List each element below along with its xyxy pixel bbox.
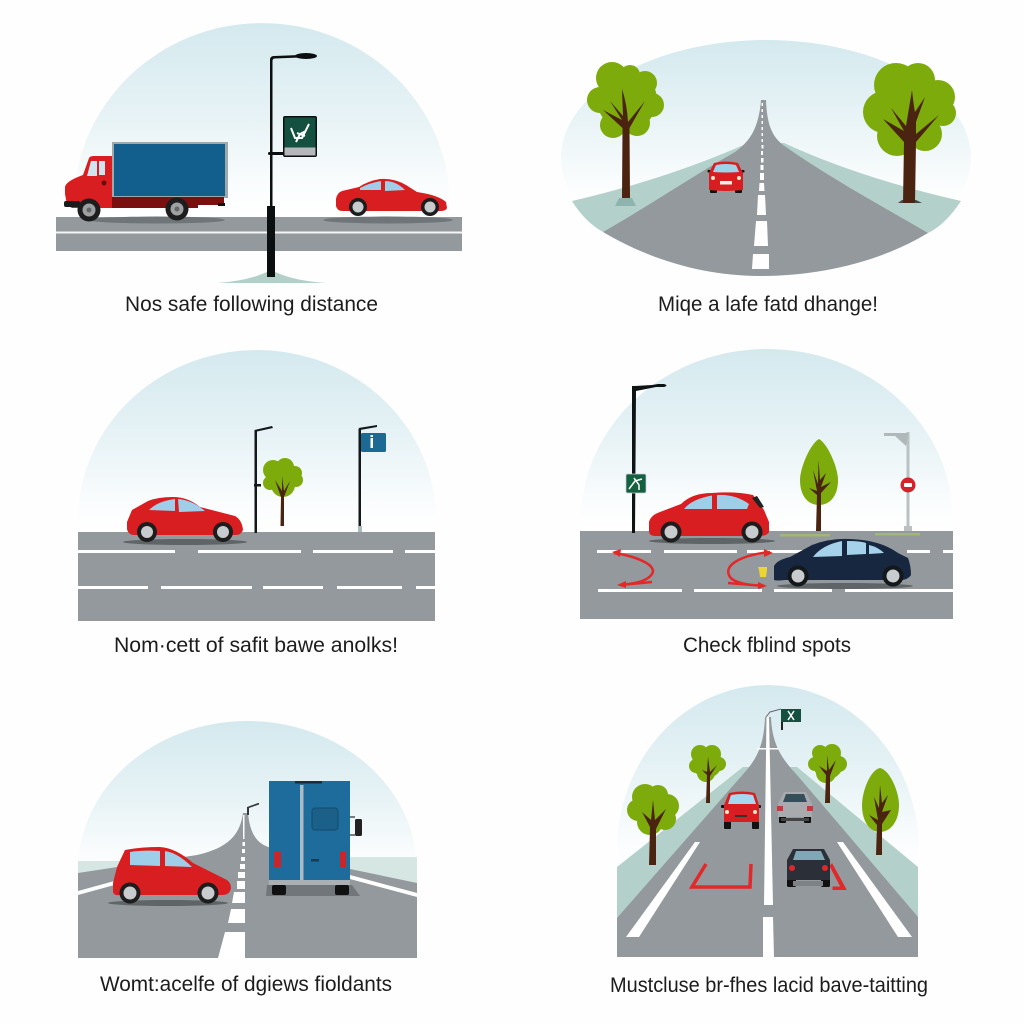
sky dome [78,350,436,532]
tree left [587,62,664,206]
distant lamp [247,803,259,815]
box truck rear view [266,781,362,896]
caption: Miqe a lafe fatd dhange! [658,293,878,316]
roadside verge [572,143,961,233]
road [78,532,435,621]
tree b [689,745,726,803]
sky dome [74,23,450,217]
lane markings [626,717,912,957]
info sign post [358,425,386,532]
centre dashes [218,815,245,958]
tree d [862,768,899,855]
panel: safe lane [78,350,436,657]
roadside verge [617,767,918,920]
tree c [808,744,847,803]
caption: Womt:acelfe of dgiews fioldants [100,973,392,996]
right red blind spot arrows [728,549,773,589]
red tailgating zone right [830,864,846,890]
panel: following distance [56,23,462,316]
panel: lane change [561,40,971,316]
caption: Nom·cett of safit bawe anolks! [114,634,398,657]
red tailgating zone left [692,864,751,887]
panel: blind spots [580,349,953,657]
lamp post with sign [217,53,327,283]
caption: Check fblind spots [683,634,851,657]
tree a [627,784,679,865]
centre dashes [752,103,769,269]
sky dome [617,685,919,870]
sky dome [561,40,971,276]
tree [263,458,303,526]
sky dome [78,721,417,880]
caption: Nos safe following distance [125,293,378,316]
tree [800,439,838,531]
red car rear view [708,162,744,193]
red sedan [336,179,447,216]
road [78,813,417,958]
dark sedan [774,539,913,589]
delivery truck [64,142,228,222]
tree right [863,63,956,203]
distant sign [766,709,801,730]
dark car [787,849,830,887]
lamp post [254,426,273,533]
yellow marker [758,567,767,577]
verge strips [78,857,417,887]
lamp post with sign [626,384,666,533]
sky dome [581,349,953,531]
road [56,216,462,251]
left red blind spot arrows [612,549,653,588]
road [603,100,928,276]
caption: Mustcluse br-fhes lacid bave-taitting [610,974,928,997]
red car [721,792,761,829]
panel: truck ahead [78,721,417,996]
grey car [777,792,813,823]
red hatchback [108,847,231,906]
red car [123,497,247,545]
grey post with red sign [884,432,916,531]
road [580,531,953,619]
panel: avoid tailgating [610,685,928,997]
road edge lines [78,875,417,897]
red hatchback [649,492,775,544]
road [617,717,918,957]
